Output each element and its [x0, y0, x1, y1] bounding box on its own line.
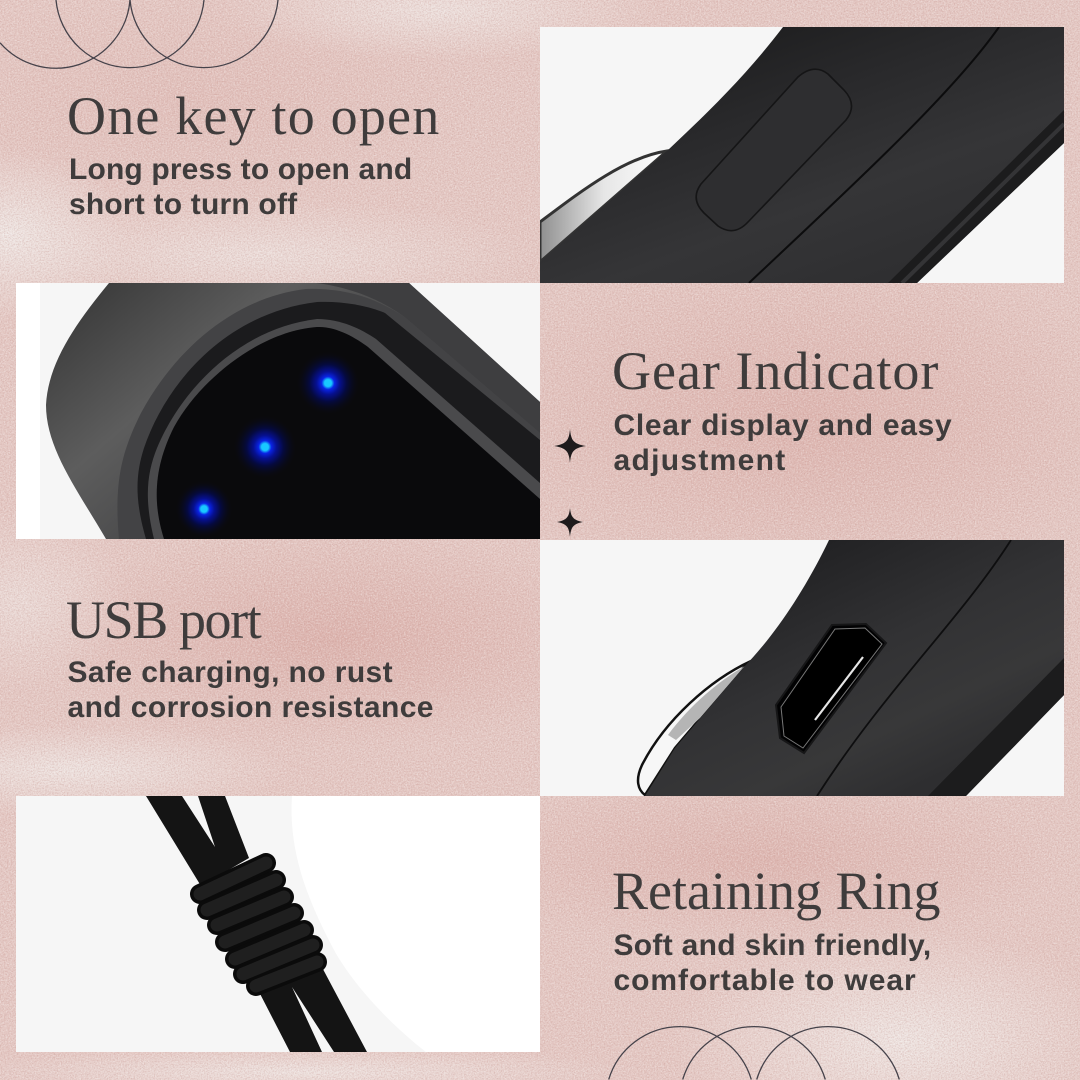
- metal tip: [638, 661, 751, 795]
- text block: retaining ring: comfortable to wear: [614, 964, 917, 997]
- bezel: [117, 289, 540, 539]
- image panel: power button close-up: [540, 27, 1064, 283]
- text block: gear indicator: Clear display and easy: [614, 409, 952, 442]
- text block: gear indicator: adjustment: [614, 444, 787, 477]
- text block: retaining ring: [612, 861, 940, 997]
- text block: usb port: Safe charging, no rust: [68, 656, 393, 689]
- lights: [296, 351, 360, 415]
- usb contact line: [815, 657, 863, 720]
- text block: one key to open: Long press to open and: [69, 152, 412, 186]
- device body: [645, 540, 1064, 796]
- icon: sparkles: [554, 429, 586, 537]
- metal tip: [540, 151, 667, 262]
- text block: gear indicator: Gear Indicator: [612, 341, 939, 401]
- device body: [46, 283, 540, 539]
- display: [157, 327, 540, 539]
- text block: one key to open: One key to open: [67, 86, 440, 146]
- text block: gear indicator: [612, 341, 952, 477]
- text block: retaining ring: Soft and skin friendly,: [614, 929, 932, 962]
- decorative circles: bottom right: [608, 1026, 900, 1080]
- usb socket: [776, 624, 886, 753]
- image panel: retaining ring cord: [16, 796, 540, 1052]
- cords: [146, 796, 367, 1052]
- button: [696, 69, 852, 231]
- device body: [540, 27, 1064, 283]
- seam line: [817, 540, 1011, 796]
- image panel: usb port close-up: [540, 540, 1064, 796]
- edge band: [888, 110, 1064, 283]
- text block: usb port: [66, 590, 434, 724]
- text block: one key to open: short to turn off: [69, 188, 297, 220]
- decorative circles: top left: [0, 0, 279, 69]
- text block: usb port: and corrosion resistance: [68, 691, 434, 724]
- edge band: [928, 658, 1064, 796]
- ring coils: [200, 863, 317, 986]
- seam line: [749, 27, 999, 283]
- text block: one key to open: [67, 86, 440, 220]
- text block: retaining ring: Retaining Ring: [612, 861, 940, 921]
- image panel: gear indicator lights: [16, 283, 540, 539]
- text block: usb port: USB port: [66, 590, 260, 650]
